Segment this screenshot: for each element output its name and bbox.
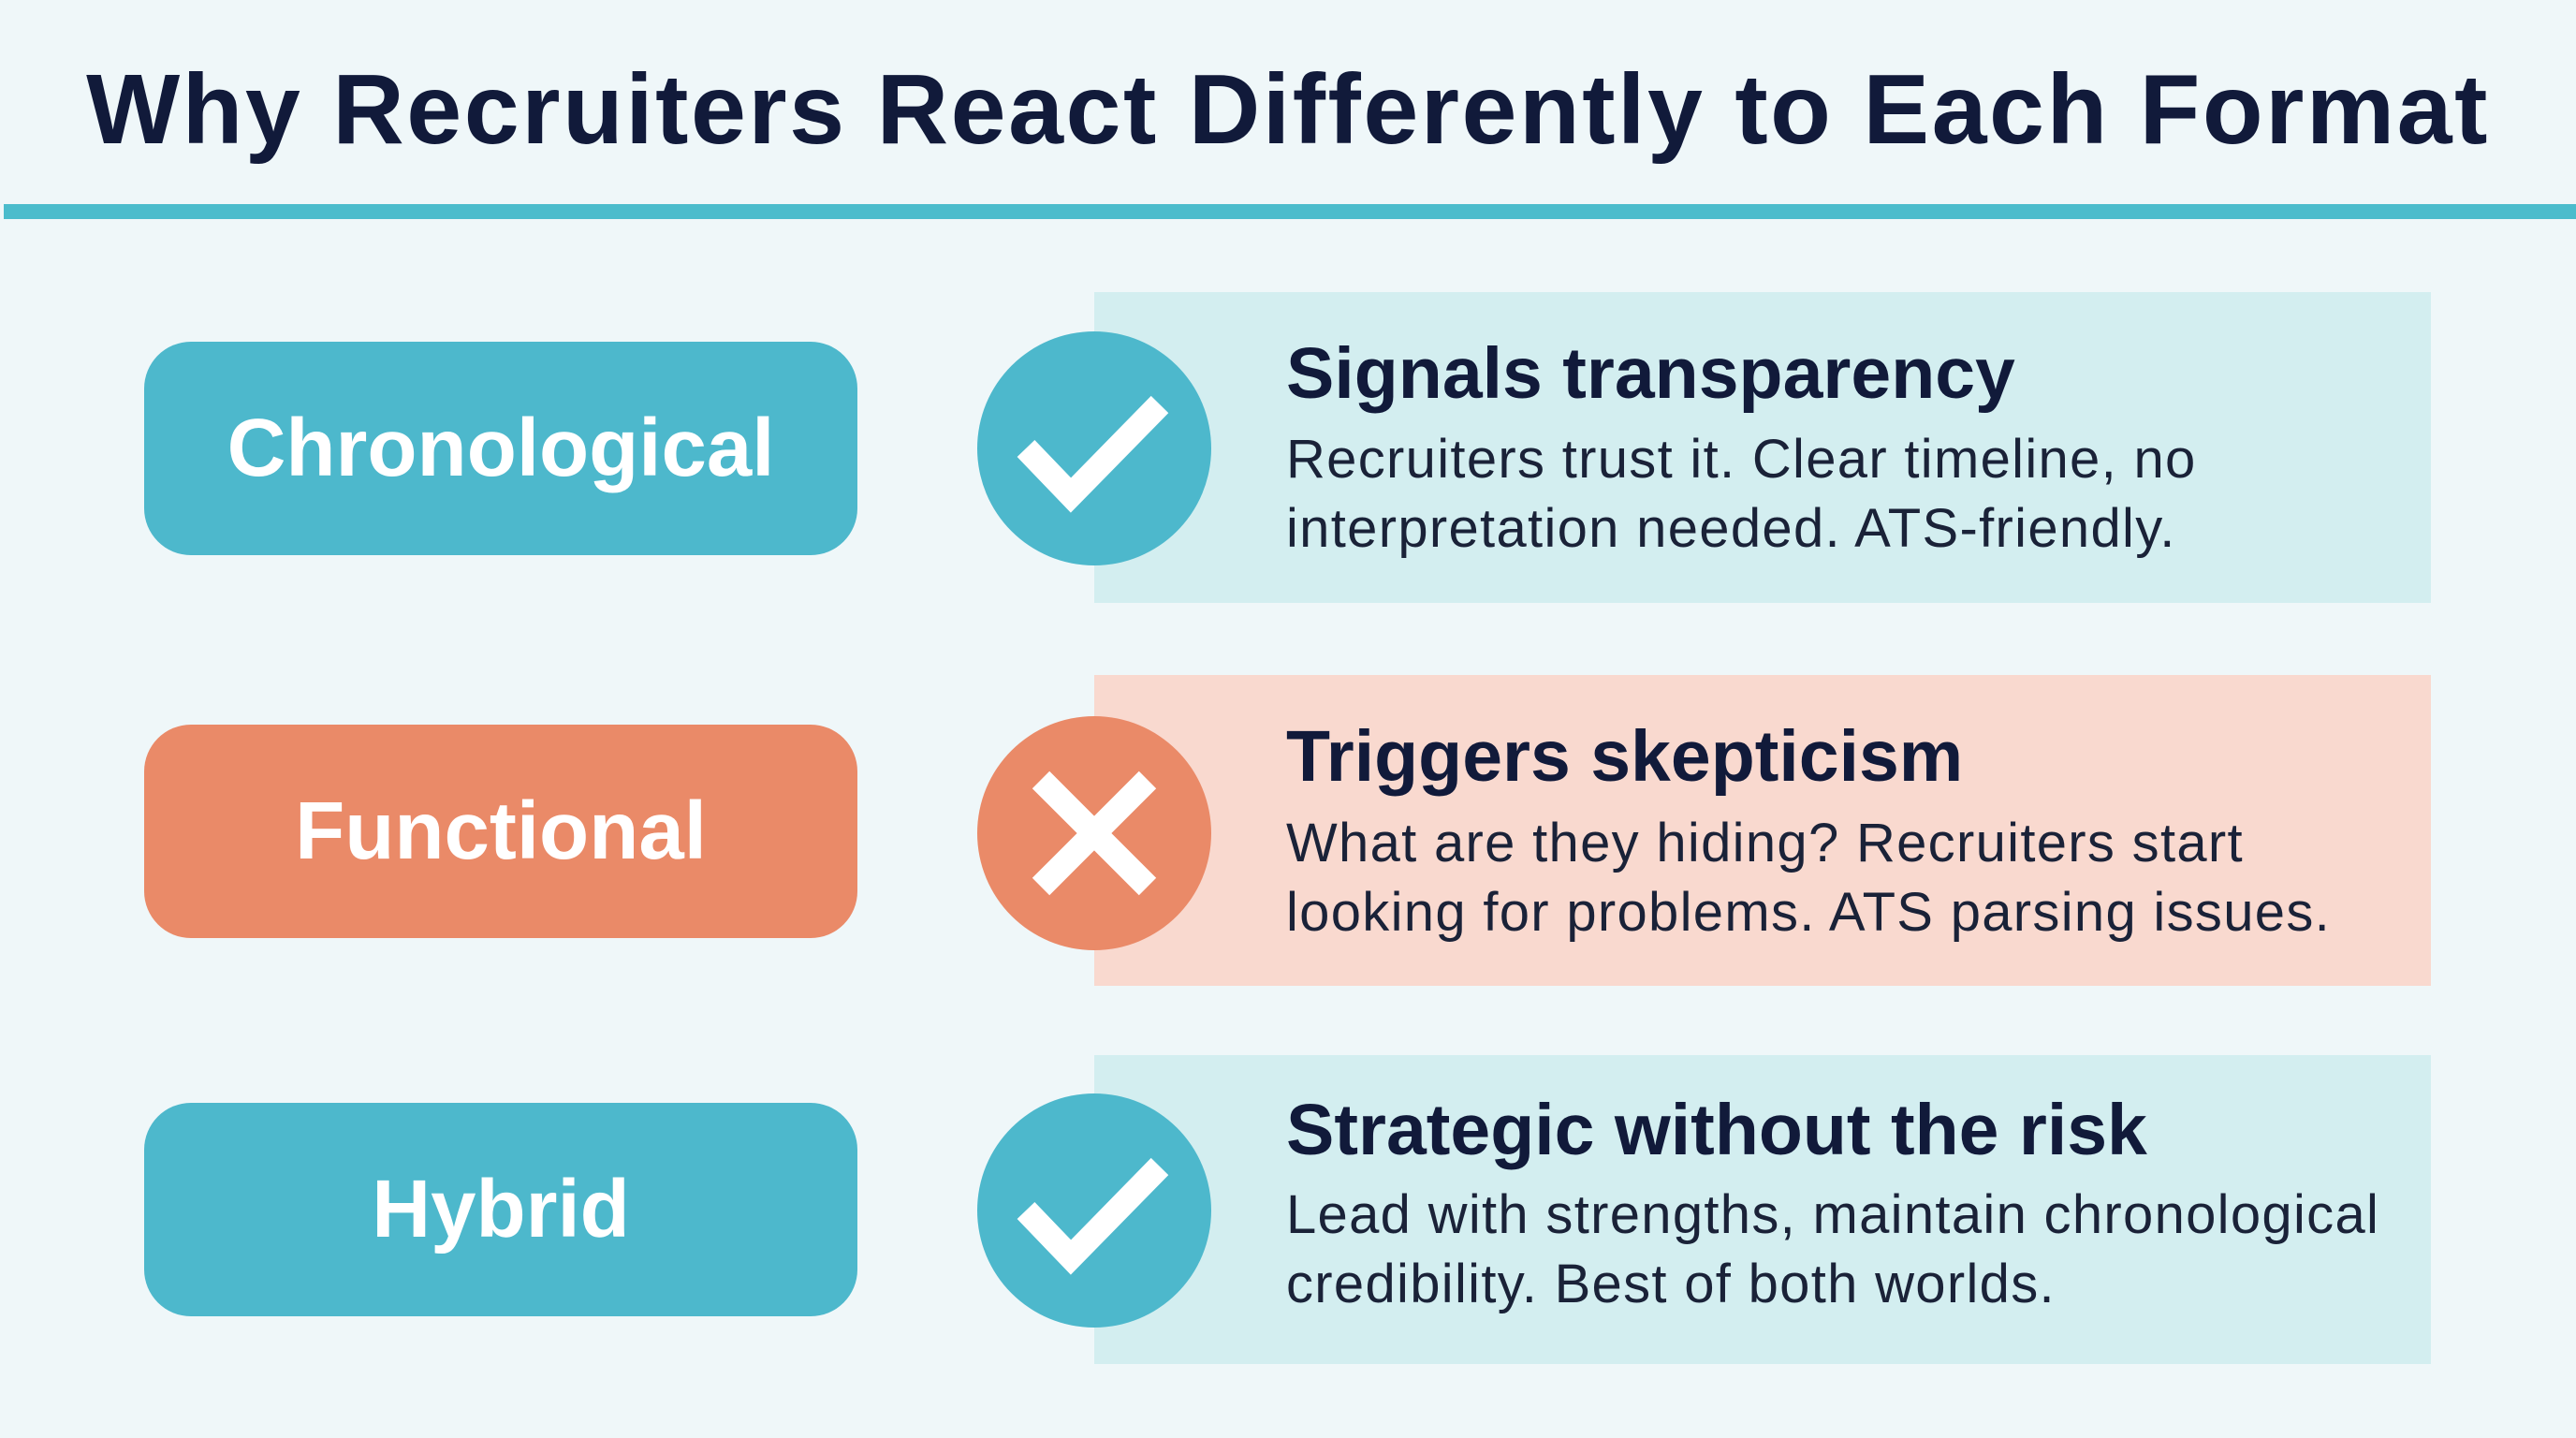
heading 1: Signals transparency: [1286, 333, 2015, 414]
body 2: What are they hiding? Recruiters start: [1286, 813, 2244, 873]
body 1: interpretation needed. ATS-friendly.: [1286, 498, 2176, 559]
pill: Hybrid: [144, 1103, 857, 1316]
panel: hybrid: [1094, 1055, 2431, 1364]
body 3: [1286, 1184, 2379, 1314]
body 3: credibility. Best of both worlds.: [1286, 1254, 2056, 1314]
pill: Chronological: Chronological: [227, 403, 774, 493]
body 1: Recruiters trust it. Clear timeline, no: [1286, 429, 2197, 490]
title: Why Recruiters React Differently to Each Format: [86, 54, 2490, 165]
pill: Functional: [144, 725, 857, 938]
body 2: [1286, 813, 2331, 943]
body 3: Lead with strengths, maintain chronological: [1286, 1184, 2379, 1245]
icon: check 2: [977, 1093, 1211, 1328]
pill: Chronological: [144, 342, 857, 555]
pill: Functional: Functional: [295, 785, 707, 876]
icon: X: [977, 716, 1211, 950]
heading 3: Strategic without the risk: [1286, 1090, 2147, 1170]
heading 2: Triggers skepticism: [1286, 716, 1963, 797]
icon: check 1: [977, 331, 1211, 565]
body 2: looking for problems. ATS parsing issues.: [1286, 882, 2331, 943]
pill: Hybrid: Hybrid: [372, 1164, 630, 1255]
body 1: [1286, 429, 2197, 559]
panel: functional: [1094, 675, 2431, 986]
panel: chronological: [1094, 292, 2431, 603]
